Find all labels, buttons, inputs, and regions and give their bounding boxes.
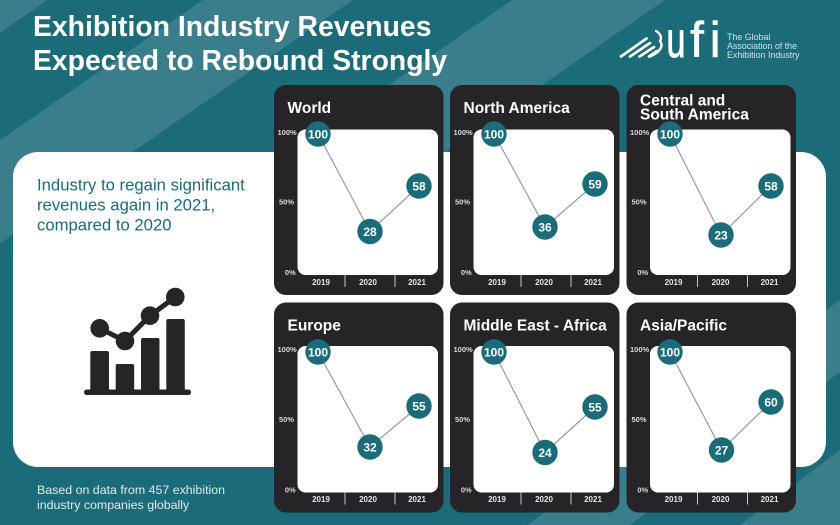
y axis labels: 100% (630, 128, 650, 137)
y axis labels: 50% (631, 415, 647, 424)
line chart: 100 (484, 345, 504, 359)
heading: Middle East - Africa: Middle East - Africa (464, 318, 607, 334)
y axis labels (630, 345, 650, 494)
y axis labels: 50% (279, 415, 294, 424)
y axis labels: 100% (454, 345, 473, 354)
line chart (305, 121, 432, 244)
y axis labels: 50% (455, 198, 470, 206)
panel: Asia/Pacific (626, 302, 796, 512)
title: Exhibition Industry Revenues (33, 11, 431, 43)
line chart: 55 (588, 400, 602, 414)
y axis labels (630, 128, 650, 277)
heading: Europe: Europe (288, 318, 341, 334)
x axis labels (312, 275, 426, 287)
y axis labels: 100% (278, 345, 297, 354)
title: Expected to Rebound Strongly (33, 45, 447, 77)
line chart: 23 (714, 228, 728, 242)
line chart (481, 339, 608, 465)
y axis labels (454, 345, 473, 494)
line chart (657, 339, 784, 463)
UFI logo (621, 12, 800, 69)
y axis labels (278, 128, 297, 277)
y axis labels (278, 345, 297, 494)
heading: World: World (288, 100, 331, 117)
y axis labels (454, 128, 473, 277)
line chart: 58 (764, 179, 778, 193)
y axis labels: 0% (637, 268, 649, 277)
line chart: 100 (308, 345, 328, 359)
line chart (305, 339, 432, 460)
summary text: Industry to regain significant (37, 176, 245, 194)
panel: North America (450, 85, 620, 295)
footnote: industry companies globally (37, 498, 190, 512)
x axis labels (665, 275, 779, 287)
line chart (481, 121, 608, 240)
x axis labels: 2020 (712, 495, 730, 504)
x axis labels: 2020 (359, 495, 377, 504)
summary text: revenues again in 2021, (37, 196, 215, 214)
heading: Asia/Pacific: Asia/Pacific (640, 318, 727, 334)
line chart: 100 (660, 345, 680, 359)
x axis labels: 2019 (488, 278, 506, 287)
y axis labels: 0% (285, 486, 296, 494)
x axis labels: 2019 (488, 495, 506, 504)
y axis labels: 0% (285, 268, 296, 277)
logo tagline: Association of the (727, 41, 797, 51)
x axis labels: 2020 (535, 278, 553, 287)
logo tagline: The Global (727, 32, 770, 42)
panel: Central and South America (626, 85, 796, 295)
logo wordmark: i (710, 12, 721, 68)
heading: Central and South America: Central and (640, 92, 725, 110)
white content panel (13, 152, 826, 467)
x axis labels: 2021 (408, 495, 426, 504)
x axis labels: 2021 (584, 278, 602, 287)
panel: World (274, 85, 444, 295)
line chart: 100 (308, 127, 328, 141)
x axis labels (312, 492, 426, 504)
x axis labels (665, 492, 779, 504)
x axis labels: 2019 (312, 495, 330, 504)
x axis labels: 2019 (665, 278, 683, 287)
y axis labels: 100% (454, 128, 473, 137)
line chart: 36 (538, 220, 552, 234)
x axis labels: 2021 (761, 278, 779, 287)
logo tagline: Exhibition Industry (727, 50, 800, 60)
logo wordmark letter u: u (666, 13, 685, 69)
y axis labels: 0% (461, 268, 472, 277)
footnote: Based on data from 457 exhibition (37, 483, 225, 497)
x axis labels (488, 492, 602, 504)
y axis labels: 50% (279, 198, 294, 206)
line chart: 58 (412, 179, 426, 193)
icon: logo wing (621, 31, 662, 56)
line chart (657, 121, 784, 248)
icon: bar chart with trend line (84, 288, 191, 395)
line chart: 28 (363, 225, 377, 239)
heading: Central and South America: South America (640, 106, 749, 124)
x axis labels: 2020 (712, 278, 730, 287)
heading: North America: North America (464, 100, 570, 117)
line chart: 59 (588, 177, 602, 191)
y axis labels: 50% (455, 415, 470, 424)
line chart: 55 (412, 399, 426, 413)
x axis labels: 2019 (665, 495, 683, 504)
y axis labels: 0% (461, 486, 472, 494)
line chart: 27 (715, 443, 728, 457)
x axis labels: 2020 (359, 278, 377, 287)
line chart: 32 (363, 440, 377, 454)
y axis labels: 100% (278, 128, 297, 137)
line chart: 100 (484, 127, 504, 141)
summary text: compared to 2020 (37, 216, 172, 234)
line chart: 100 (660, 127, 680, 141)
x axis labels (488, 275, 602, 287)
x axis labels: 2021 (408, 278, 426, 287)
y axis labels: 100% (630, 345, 650, 354)
panel: Europe (274, 302, 444, 512)
x axis labels: 2021 (761, 495, 779, 504)
x axis labels: 2020 (535, 495, 553, 504)
line chart: 24 (538, 446, 552, 460)
y axis labels: 50% (631, 198, 647, 206)
logo wordmark: f (690, 12, 704, 68)
panel: Middle East - Africa (450, 302, 620, 512)
x axis labels: 2019 (312, 278, 330, 287)
x axis labels: 2021 (584, 495, 602, 504)
line chart: 60 (764, 395, 778, 409)
y axis labels: 0% (637, 486, 649, 494)
